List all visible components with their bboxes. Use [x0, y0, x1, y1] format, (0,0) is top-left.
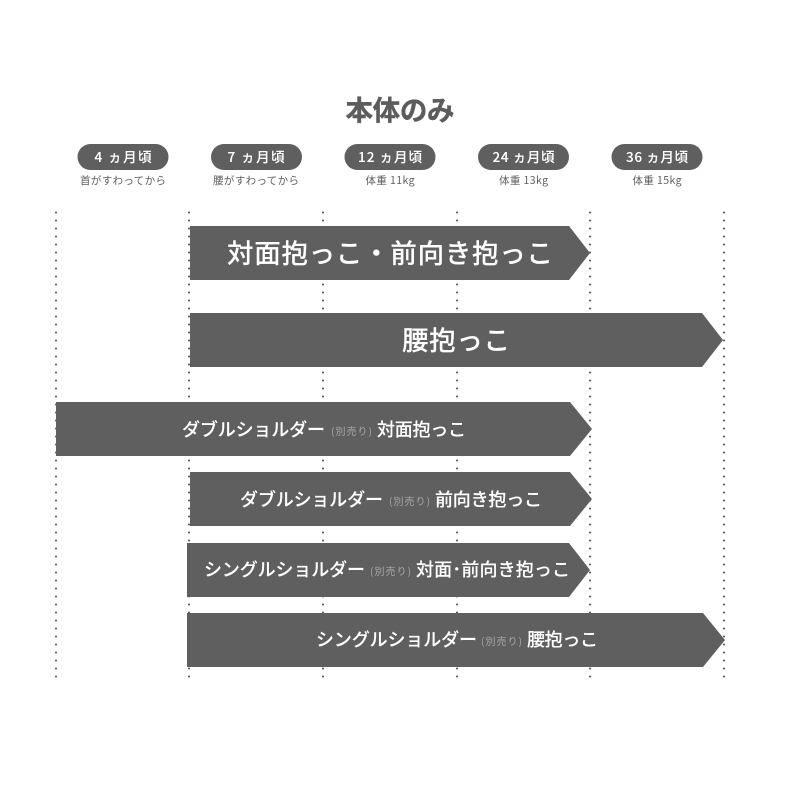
arrow bar: single shoulder face-in and forward carry: シングルショルダー [204, 556, 365, 582]
arrow bar: double shoulder face-in carry [56, 402, 592, 456]
arrow bar: double shoulder face-in carry: (別売り) [331, 423, 372, 438]
age header: 24 months: 体重 13kg [499, 173, 548, 188]
age header: 24 months [478, 144, 569, 188]
arrow bar: hip carry [190, 313, 723, 367]
arrow bar: face-in and forward carry [190, 226, 590, 280]
arrow bar: hip carry: 腰抱っこ [402, 319, 510, 358]
arrow bar: double shoulder face-in carry: 対面抱っこ [377, 416, 466, 442]
arrow bar: double shoulder forward carry: 前向き抱っこ [435, 486, 542, 512]
arrow bar: double shoulder face-in carry: ダブルショルダー [182, 416, 325, 442]
age header: 12 months: 体重 11kg [366, 173, 415, 188]
age header: 12 months [344, 144, 436, 188]
arrow bar: face-in and forward carry: 対面抱っこ・前向き抱っこ [227, 232, 553, 271]
age header: 4 months: 首がすわってから [80, 173, 166, 188]
age header: 4 months: 4 ヵ月頃 [94, 146, 152, 166]
arrow bar: single shoulder face-in and forward carry: (別売り) [370, 563, 411, 578]
age header: 12 months: 12 ヵ月頃 [358, 146, 422, 166]
arrow bar: single shoulder hip carry: シングルショルダー [316, 626, 477, 652]
age header: 4 months [78, 144, 168, 188]
age header: 7 months: 7 ヵ月頃 [228, 146, 285, 166]
age header: 7 months: 腰がすわってから [213, 173, 299, 188]
age header: 24 months: 24 ヵ月頃 [492, 146, 555, 166]
arrow bar: double shoulder forward carry: (別売り) [389, 493, 430, 508]
dotted timeline guides [56, 212, 724, 681]
age header: 36 months [612, 144, 702, 188]
arrow bar: single shoulder hip carry [187, 613, 725, 667]
age header: 36 months: 36 ヵ月頃 [626, 146, 688, 166]
arrow bar: single shoulder hip carry: 腰抱っこ [527, 626, 598, 652]
arrow bar: double shoulder forward carry [190, 472, 592, 526]
arrow bar: double shoulder forward carry: ダブルショルダー [240, 486, 383, 512]
title: 本体のみ [346, 88, 454, 128]
arrow bar: single shoulder hip carry: (別売り) [481, 633, 522, 648]
age header: 36 months: 体重 15kg [632, 173, 682, 188]
age header: 7 months [211, 144, 302, 188]
arrow bar: single shoulder face-in and forward carry: 対面･前向き抱っこ [416, 556, 570, 582]
arrow bar: single shoulder face-in and forward carry [187, 543, 590, 597]
